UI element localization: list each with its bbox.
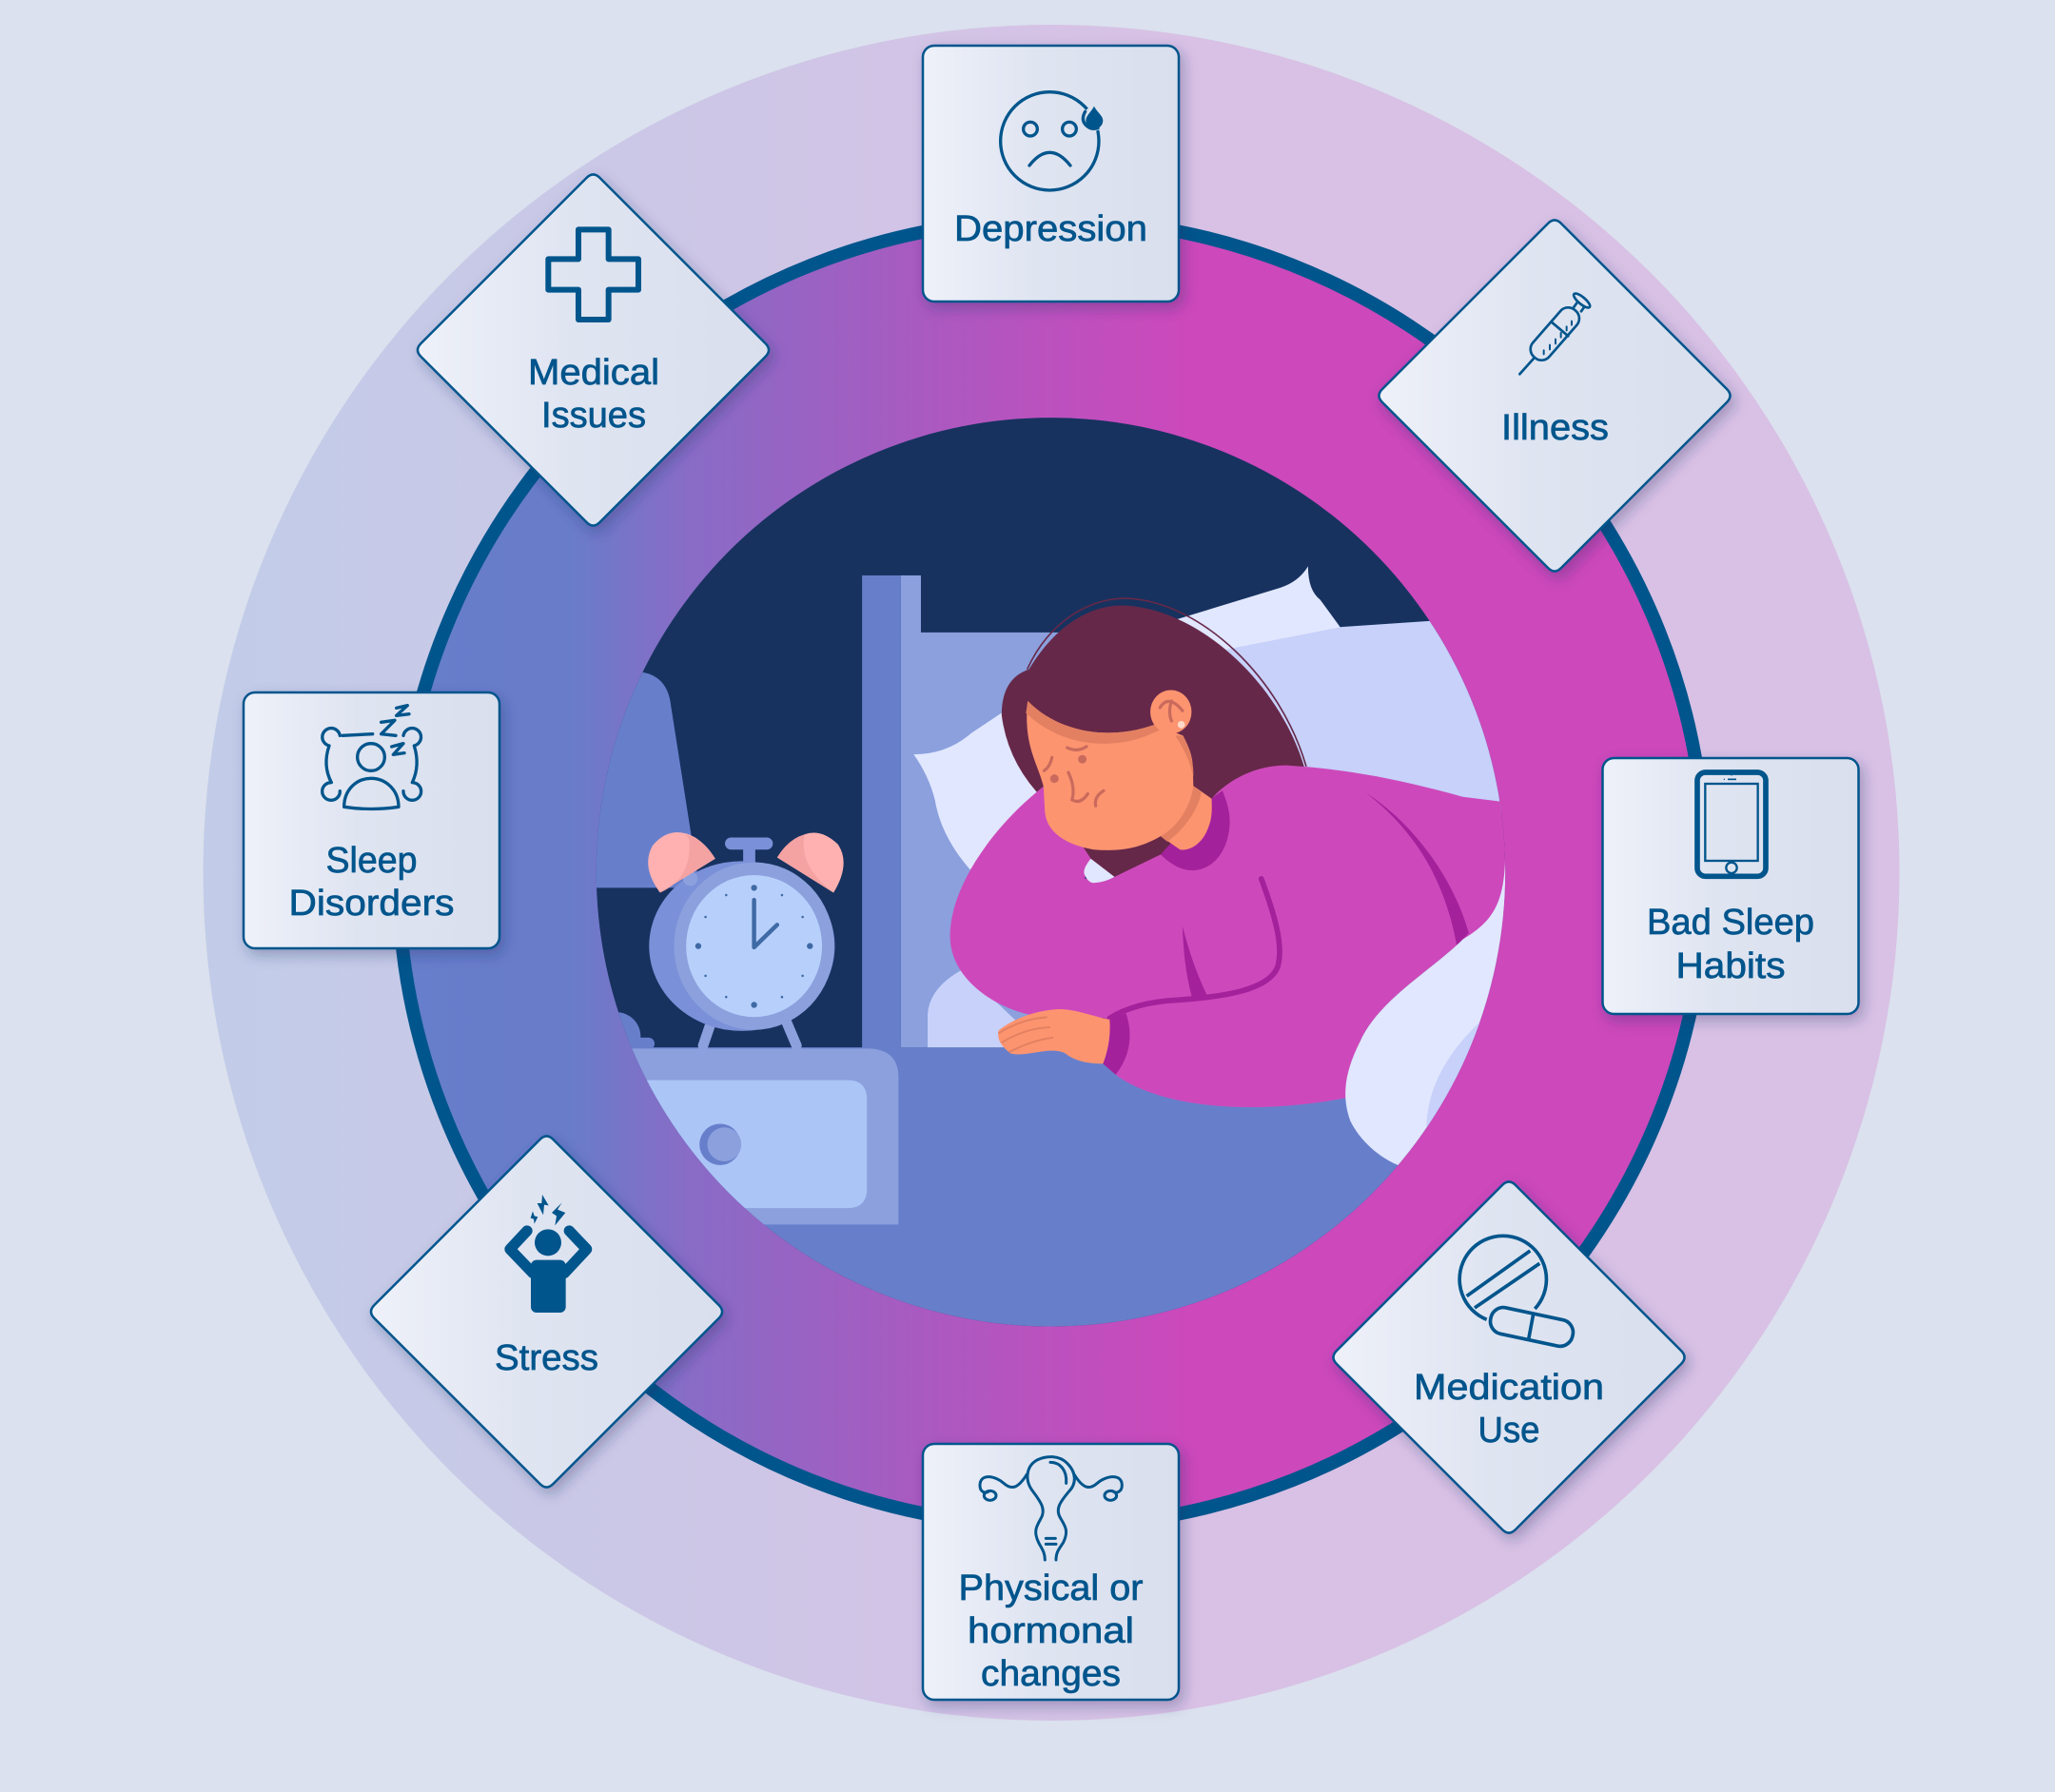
label: Illness: Illness xyxy=(1501,408,1609,448)
sweater xyxy=(950,766,1554,1107)
headboard xyxy=(862,575,1059,1048)
middle ring xyxy=(398,219,1705,1526)
face xyxy=(1026,690,1212,850)
card: Physical or hormonal changes xyxy=(923,1444,1179,1700)
hand xyxy=(998,1009,1110,1063)
lower blanket fold xyxy=(928,970,1015,1048)
card: Illness xyxy=(1380,221,1730,571)
blanket xyxy=(1345,862,1505,1165)
lamp xyxy=(596,672,696,1050)
card: Sleep Disorders xyxy=(244,692,499,948)
card: Depression xyxy=(923,46,1179,302)
icon: sad face with sweat drop xyxy=(1001,92,1106,190)
icon: syringe xyxy=(1519,291,1592,374)
nightstand xyxy=(632,1048,898,1225)
alarm clock xyxy=(648,832,844,1045)
label: Physical or hormonal changes: hormonal xyxy=(968,1611,1134,1651)
bed base xyxy=(634,1047,1470,1326)
label: Medical Issues: Issues xyxy=(541,396,646,436)
card: Medication Use xyxy=(1334,1181,1684,1533)
icon: stressed person xyxy=(510,1195,587,1313)
label: Medication Use: Use xyxy=(1478,1411,1539,1451)
label: Medication Use: Medication xyxy=(1414,1368,1604,1408)
label: Sleep Disorders: Disorders xyxy=(289,884,455,924)
label: Bad Sleep Habits xyxy=(1647,903,1814,986)
label: Medical Issues xyxy=(528,353,659,436)
sweater folds xyxy=(1103,792,1469,1075)
card: Stress xyxy=(371,1136,722,1488)
outer circle xyxy=(204,25,1899,1721)
front pillow xyxy=(913,713,1037,869)
collar xyxy=(1084,790,1230,883)
icon: pills xyxy=(1459,1236,1576,1349)
icon: tablet xyxy=(1697,772,1766,876)
label: Physical or hormonal changes: Physical or xyxy=(959,1568,1144,1608)
card: Medical Issues xyxy=(418,175,769,525)
label: Physical or hormonal changes xyxy=(959,1568,1144,1694)
back pillow xyxy=(1178,567,1341,651)
label: Stress: Stress xyxy=(495,1338,598,1378)
illustration: woman awake in bed beside alarm clock xyxy=(596,418,1505,1326)
label: Bad Sleep Habits: Habits xyxy=(1676,946,1785,986)
label: Medical Issues: Medical xyxy=(528,353,659,393)
label: Bad Sleep Habits: Bad Sleep xyxy=(1647,903,1814,943)
icon: medical cross xyxy=(548,229,638,320)
card: Bad Sleep Habits xyxy=(1602,758,1859,1014)
icon: uterus xyxy=(980,1457,1122,1560)
icon: person sleeping on pillow xyxy=(323,706,421,808)
hair xyxy=(1002,598,1306,879)
label: Sleep Disorders xyxy=(289,841,455,924)
label: Sleep Disorders: Sleep xyxy=(325,841,417,881)
label: Physical or hormonal changes: changes xyxy=(981,1654,1121,1694)
big pillow xyxy=(1225,620,1501,812)
label: Medication Use xyxy=(1414,1368,1604,1451)
label: Depression: Depression xyxy=(954,209,1147,249)
